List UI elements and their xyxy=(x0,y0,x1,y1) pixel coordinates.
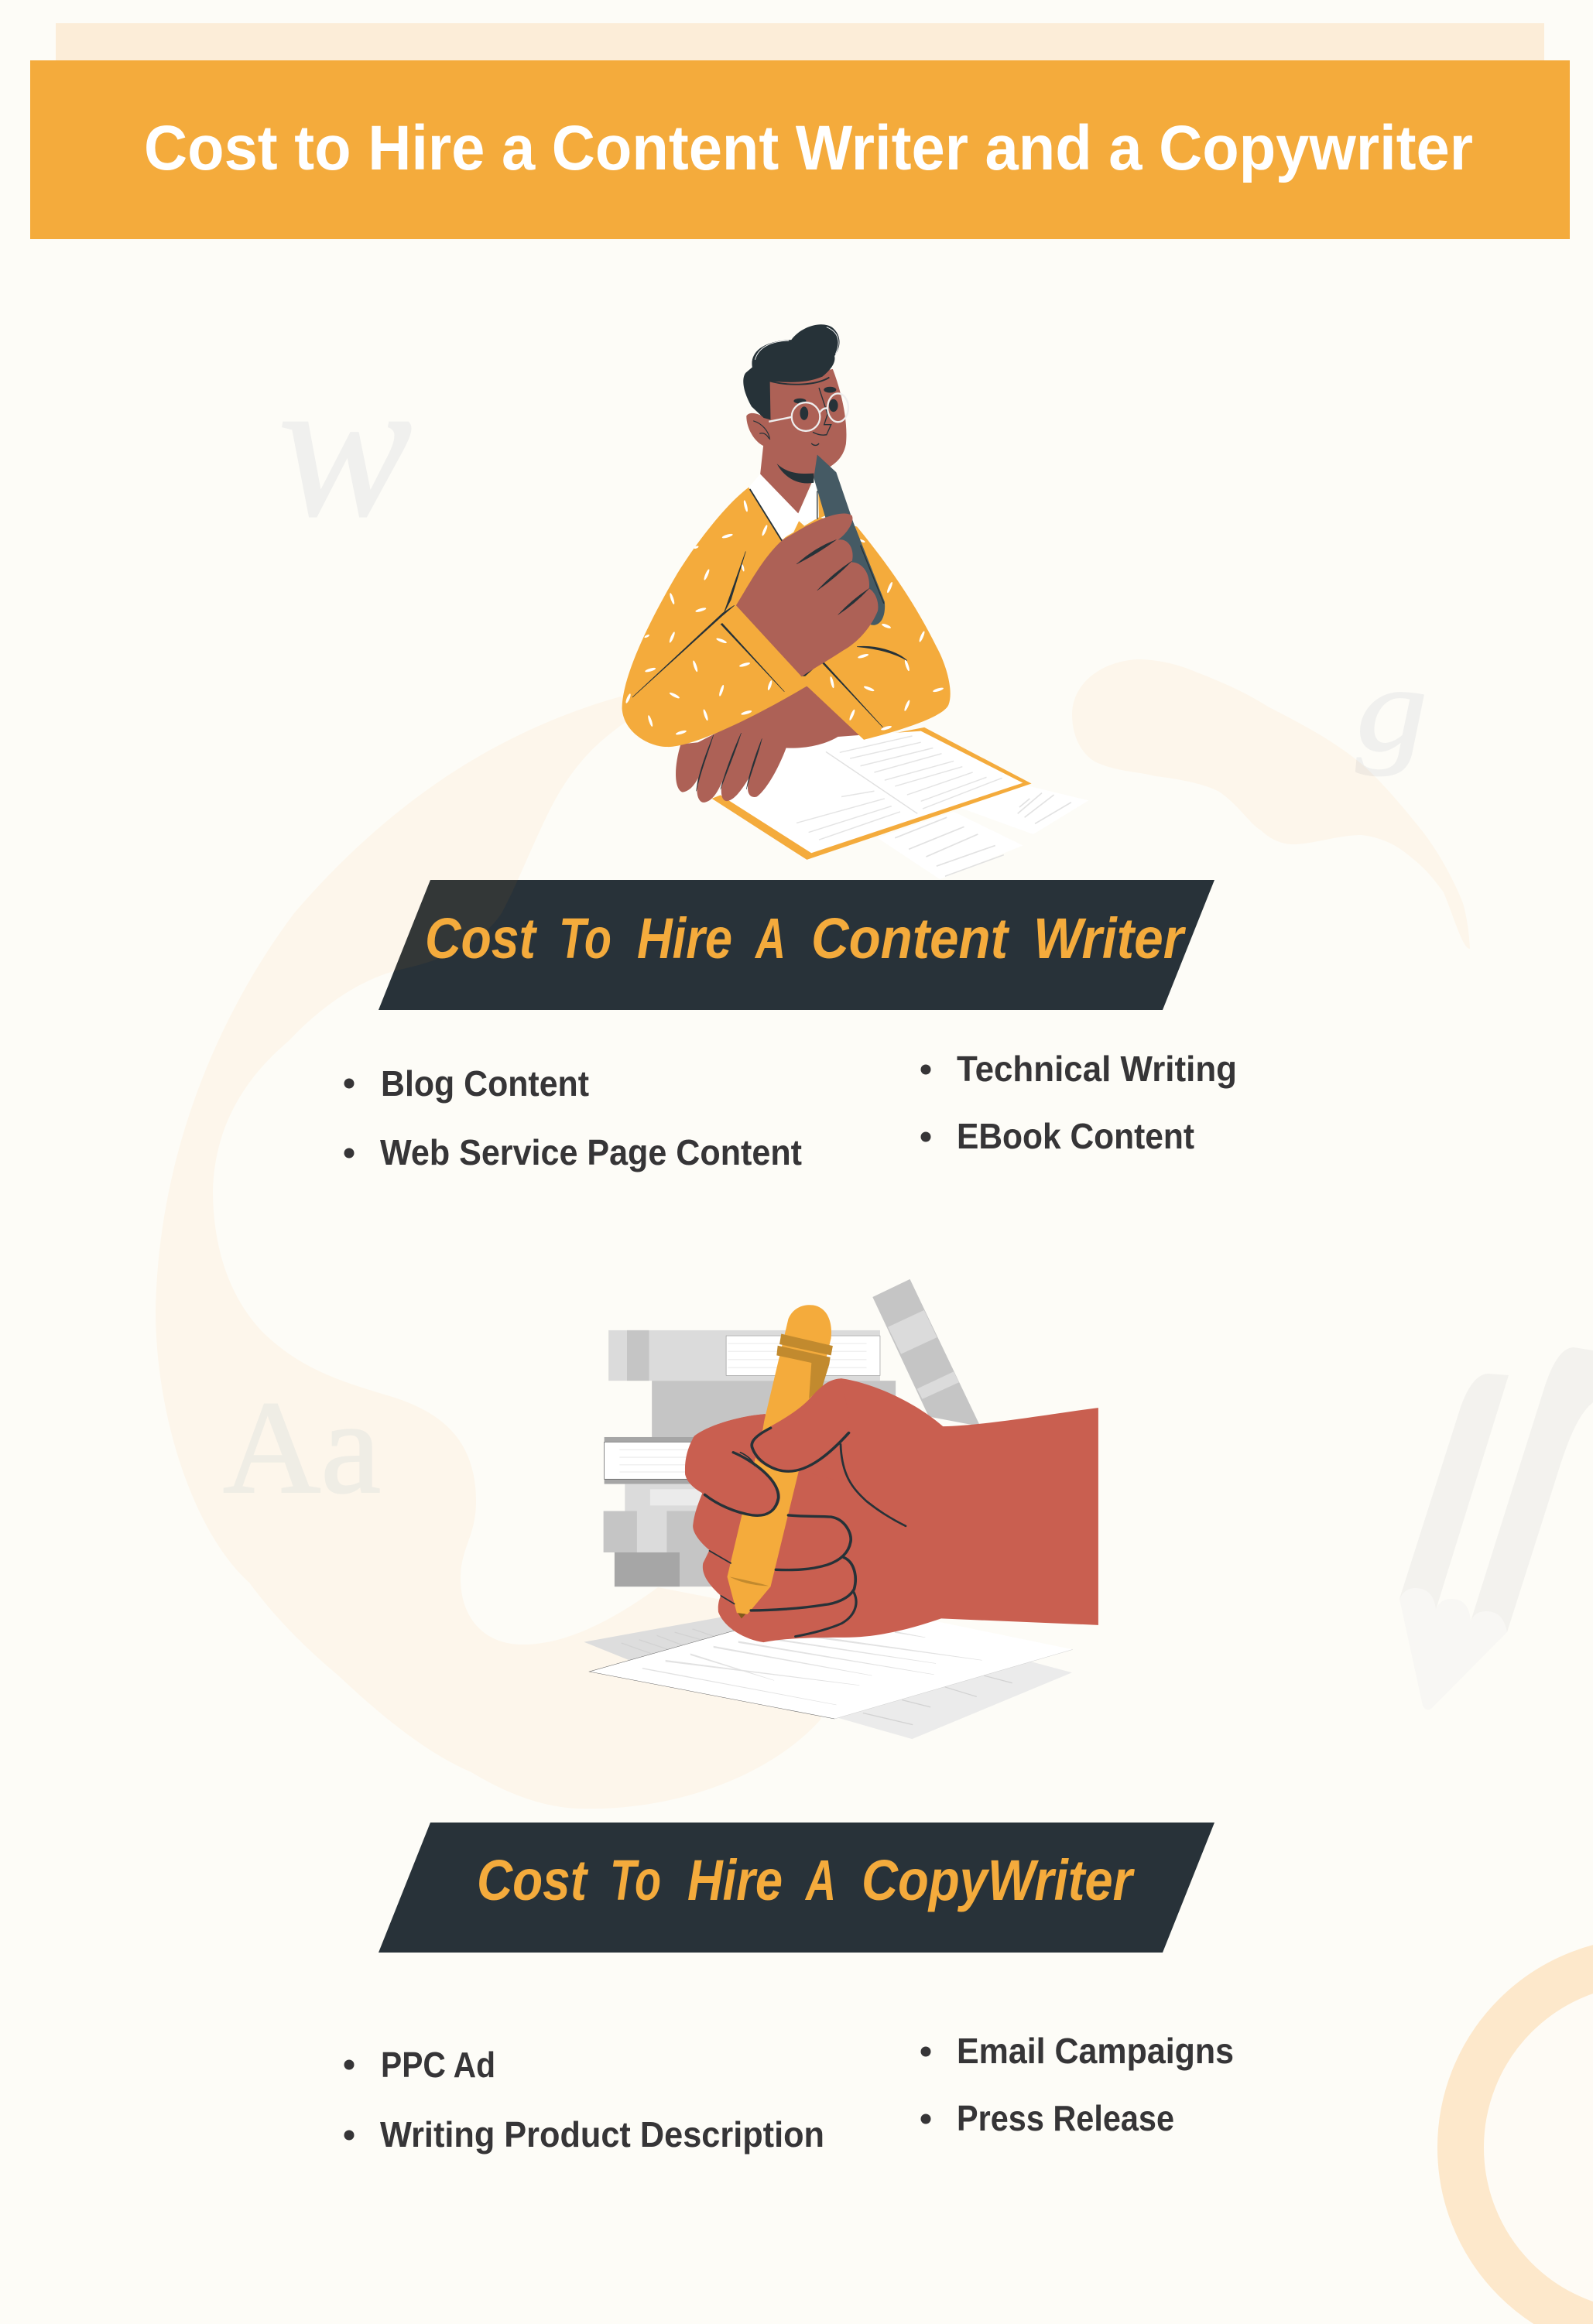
heading: content writer: Content xyxy=(811,906,1010,970)
list: content writer right: EBook Content xyxy=(957,1116,1194,1156)
background swoosh left xyxy=(156,697,851,1809)
heading: copywriter: A xyxy=(805,1848,836,1912)
list: copywriter left: PPC Ad xyxy=(381,2045,495,2085)
heading: content writer: Writer xyxy=(1033,906,1187,970)
hand base xyxy=(685,1378,1098,1642)
background letter g: g xyxy=(1356,642,1427,776)
list: content writer right xyxy=(921,1049,1237,1156)
hair xyxy=(743,324,840,419)
hand on chin xyxy=(736,514,878,676)
heading: content writer xyxy=(425,906,1187,970)
heading: copywriter: CopyWriter xyxy=(862,1848,1136,1912)
sweater xyxy=(622,488,951,747)
heading: content writer: To xyxy=(559,906,612,970)
pencil xyxy=(727,1305,833,1618)
stack of books xyxy=(604,1330,896,1586)
heading: copywriter xyxy=(477,1848,1136,1912)
list: content writer right: Technical Writing xyxy=(957,1049,1237,1089)
background letters Aa: Aa xyxy=(223,1374,381,1521)
illustration: hand writing with pencil xyxy=(584,1279,1098,1739)
list: copywriter right: Email Campaigns xyxy=(957,2031,1234,2071)
beard shadow xyxy=(777,464,814,483)
list: copywriter right: Press Release xyxy=(957,2098,1174,2138)
list: copywriter right xyxy=(921,2031,1234,2138)
background pencil icon xyxy=(1399,1347,1593,1710)
title: Cost to Hire a Content Writer and a Copywriter xyxy=(144,113,1473,183)
shirt collar xyxy=(749,474,817,539)
list: content writer left: Blog Content xyxy=(381,1063,589,1104)
header bar xyxy=(30,60,1570,239)
pen xyxy=(814,454,885,625)
header back strip xyxy=(56,23,1544,60)
banner: content writer background xyxy=(379,880,1214,1010)
sweater flecks xyxy=(625,500,944,735)
background swoosh right xyxy=(1072,659,1470,949)
banner: copywriter background xyxy=(379,1823,1214,1953)
thumb over pencil xyxy=(752,1378,849,1482)
list: copywriter left: Writing Product Description xyxy=(380,2114,824,2155)
ruler xyxy=(872,1279,980,1426)
list: copywriter left xyxy=(344,2045,824,2155)
open book xyxy=(712,727,1032,860)
heading: copywriter: Hire xyxy=(687,1848,783,1912)
neck and face xyxy=(760,369,846,514)
loose paper right xyxy=(961,786,1088,834)
ear xyxy=(746,413,770,446)
background letter w: w xyxy=(278,336,413,559)
heading: content writer: Cost xyxy=(425,906,538,970)
list: content writer left xyxy=(344,1063,802,1172)
sleeve fold lines xyxy=(632,552,907,727)
eyebrows, eyes and nose xyxy=(770,378,838,445)
heading: copywriter: Cost xyxy=(477,1848,589,1912)
lower arm and fingers xyxy=(676,686,864,803)
finger contour lines xyxy=(705,1428,906,1637)
background ring xyxy=(1461,1961,1593,2324)
loose paper bottom xyxy=(878,812,1023,879)
list: content writer left: Web Service Page Content xyxy=(380,1132,802,1172)
glasses xyxy=(769,393,848,431)
illustration: man thinking with pen xyxy=(622,324,1088,879)
heading: copywriter: To xyxy=(610,1848,661,1912)
front paper xyxy=(589,1621,1073,1719)
heading: content writer: Hire xyxy=(637,906,732,970)
heading: content writer: A xyxy=(755,906,786,970)
index finger over pencil xyxy=(685,1414,780,1516)
back papers xyxy=(584,1614,806,1674)
